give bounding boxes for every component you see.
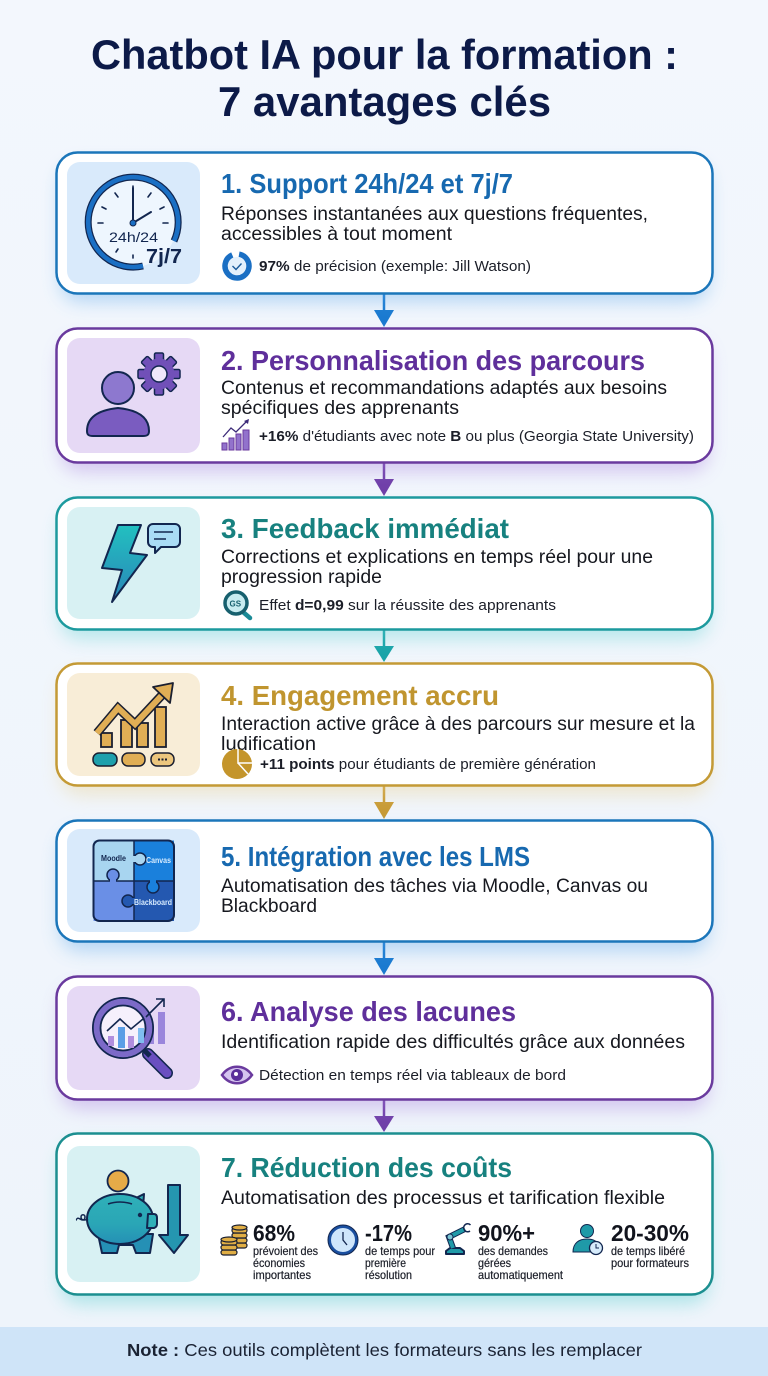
icon: GS magnifier <box>225 592 250 618</box>
text block <box>221 547 653 588</box>
stat: -17%: résolution <box>365 1268 412 1282</box>
text block: Contenus et recommandations adaptés aux besoins <box>221 378 667 399</box>
text block: Interaction active grâce à des parcours sur mesure et la <box>221 714 695 735</box>
stat: -17%: de temps pour <box>365 1244 435 1258</box>
heading: 2. Personnalisation des parcours <box>221 345 645 376</box>
text block: spécifiques des apprenants <box>221 398 459 419</box>
stat: 20-30%: de temps libéré <box>611 1244 685 1258</box>
stat: 97% de précision (exemple: Jill Watson) <box>259 259 531 275</box>
stat: +16% d'étudiants avec note B ou plus (Georgia State University) <box>259 429 694 445</box>
panel: 5 integration <box>56 820 712 951</box>
text block: Blackboard <box>221 896 317 917</box>
stat: 20-30% <box>573 1220 689 1270</box>
icon: learner with gear <box>87 353 180 436</box>
icon: puzzle: Blackboard <box>134 898 172 907</box>
heading: 6. Analyse des lacunes <box>221 996 516 1027</box>
stat: 68%: économies <box>253 1256 305 1270</box>
panel: 1 support <box>56 152 712 302</box>
stat: 68%: prévoient des <box>253 1244 318 1258</box>
heading: 1. Support 24h/24 et 7j/7 <box>221 168 513 199</box>
stat: -17%: première <box>365 1256 406 1270</box>
panel: 4 engagement <box>56 664 712 795</box>
panel: 3 feedback <box>56 498 712 639</box>
note band: Note : Ces outils complètent les formateurs sans les remplacer <box>127 1340 642 1360</box>
icon: pie chart <box>222 749 252 779</box>
text block: accessibles à tout moment <box>221 224 453 245</box>
text block: progression rapide <box>221 567 382 588</box>
heading: 7. Réduction des coûts <box>221 1152 512 1183</box>
stat: 20-30%: 20-30% <box>611 1220 689 1246</box>
stat: 90%+: des demandes <box>478 1244 548 1258</box>
title: Chatbot IA pour la formation : <box>91 31 678 78</box>
connecting arrows <box>374 294 394 1132</box>
stat: 90%+: 90%+ <box>478 1220 535 1246</box>
icon: puzzle: Moodle <box>101 853 126 863</box>
stat: Effet d=0,99 sur la réussite des apprenants <box>259 598 556 614</box>
text block <box>221 204 648 245</box>
stat: Détection en temps réel via tableaux de bord <box>259 1068 566 1084</box>
stat: 68%: importantes <box>253 1268 311 1282</box>
panel: 2 personnalisation <box>56 328 712 472</box>
icon: growth bars <box>222 419 249 450</box>
text block: Réponses instantanées aux questions fréquentes, <box>221 204 648 225</box>
stat: 90%+: gérées <box>478 1256 511 1270</box>
icon: puzzle: Canvas <box>146 856 171 865</box>
title: 7 avantages clés <box>218 78 551 125</box>
icon: clock: 7j/7 <box>146 246 182 268</box>
text block <box>221 714 695 755</box>
icon: puzzle <box>93 840 174 921</box>
title <box>91 31 678 125</box>
stat: 68%: 68% <box>253 1220 295 1246</box>
stat: 90%+ <box>446 1220 564 1282</box>
stat: -17%: -17% <box>365 1220 412 1246</box>
stat: 90%+: automatiquement <box>478 1268 564 1282</box>
text block: Automatisation des tâches via Moodle, Canvas ou <box>221 876 648 897</box>
icon: lightning and bubble <box>102 524 180 602</box>
stat: 20-30%: pour formateurs <box>611 1256 689 1270</box>
text block: Corrections et explications en temps réel pour une <box>221 547 653 568</box>
icon: eye <box>222 1067 252 1083</box>
text block: Automatisation des processus et tarification flexible <box>221 1188 665 1209</box>
text block: ludification <box>221 734 316 755</box>
panel: 6 analyse <box>56 976 712 1109</box>
icon: clock: 24h/24 <box>109 229 158 245</box>
text block <box>221 876 648 917</box>
heading: 5. Intégration avec les LMS <box>221 841 530 872</box>
heading: 4. Engagement accru <box>221 680 499 711</box>
text block <box>221 378 667 419</box>
icon: GS magnifier: GS <box>230 600 242 608</box>
icon: clock <box>88 177 182 268</box>
note band <box>0 1327 768 1376</box>
stat: +11 points pour étudiants de première génération <box>260 757 596 773</box>
stat: -17% <box>328 1220 435 1282</box>
icon: growth chart <box>93 683 174 766</box>
panel: 7 couts <box>56 1134 712 1304</box>
text block: Identification rapide des difficultés grâce aux données <box>221 1032 685 1053</box>
icon: piggy bank <box>77 1170 188 1253</box>
stat: 68% <box>221 1220 318 1282</box>
icon: magnifier over chart <box>93 998 167 1073</box>
heading: 3. Feedback immédiat <box>221 513 509 544</box>
icon: check ring <box>223 252 251 280</box>
